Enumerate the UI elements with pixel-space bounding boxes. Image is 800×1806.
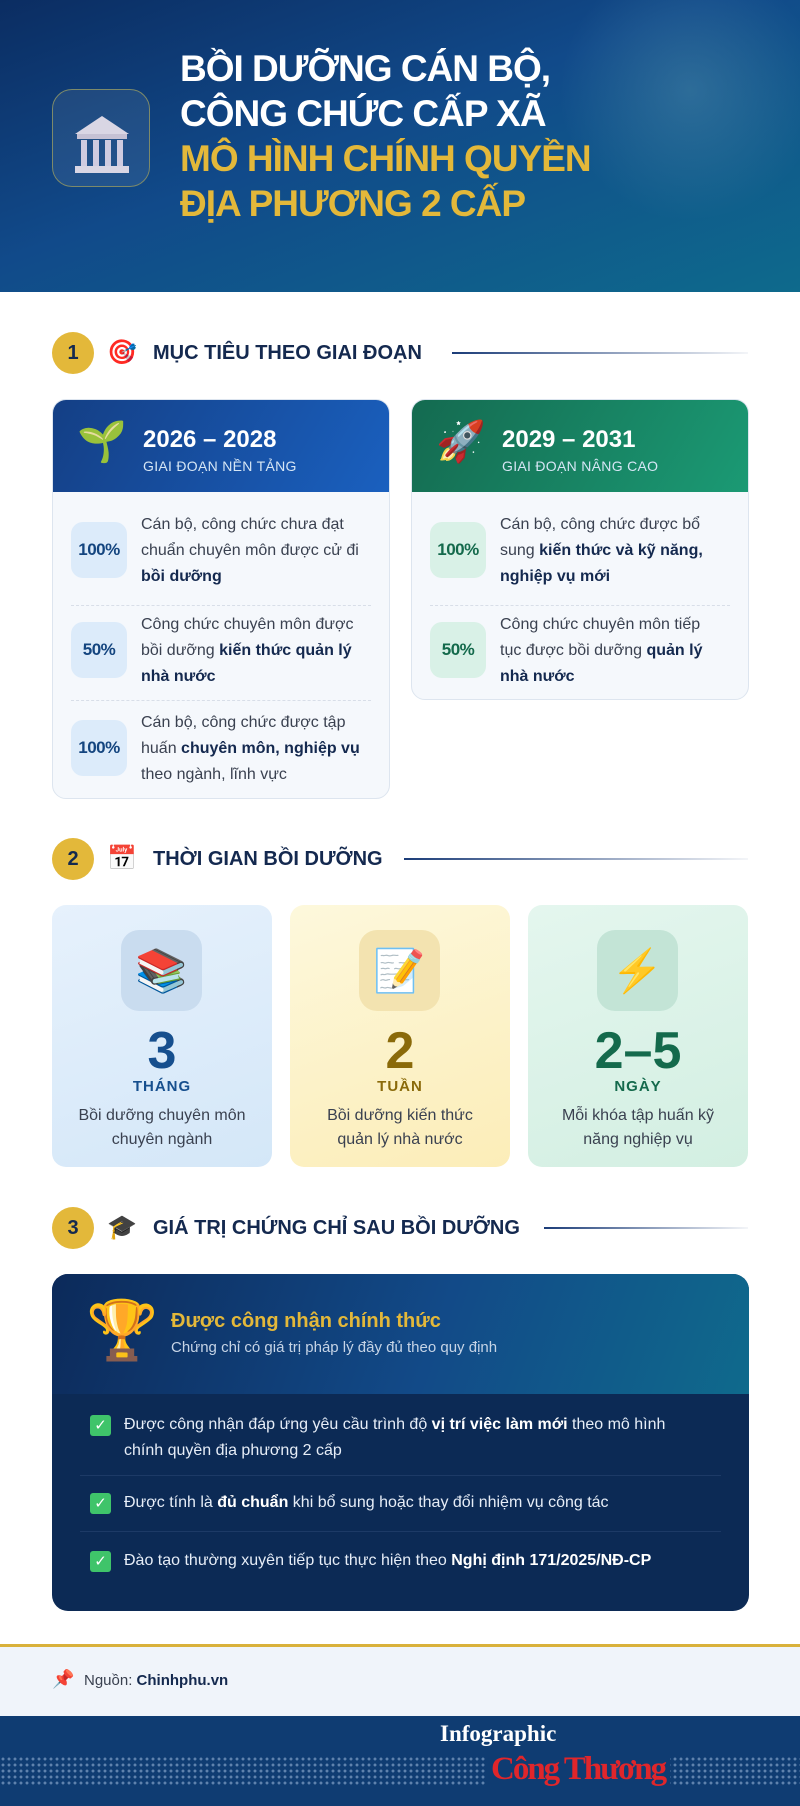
icon: pin: 📌 bbox=[52, 1669, 74, 1689]
row 1: Cán bộ, công chức chưa đạt chuẩn chuyên môn được cử đi bồi dưỡng bbox=[141, 516, 359, 585]
panel: 2-5 days bbox=[528, 905, 748, 1167]
row 1: 100% bbox=[78, 540, 120, 559]
panel: 2029-2031 bbox=[411, 399, 749, 700]
row 2 bbox=[430, 616, 702, 685]
footer source: Nguồn: Chinhphu.vn bbox=[84, 1672, 228, 1689]
icon: sprout: 🌱 bbox=[77, 420, 127, 464]
row 2: Công chức chuyên môn được bồi dưỡng kiến thức quản lý nhà nước bbox=[141, 616, 353, 685]
section 3 heading bbox=[52, 1207, 748, 1249]
title bbox=[180, 48, 550, 134]
panel: 2-5 days: 2–5 bbox=[595, 1022, 681, 1080]
logo bbox=[440, 1721, 670, 1787]
panel: certificate value: Chứng chỉ có giá trị pháp lý đầy đủ theo quy định bbox=[171, 1339, 497, 1356]
header banner bbox=[0, 0, 800, 292]
icon: document: 📝 bbox=[373, 947, 426, 994]
subtitle: MÔ HÌNH CHÍNH QUYỀN bbox=[180, 138, 591, 179]
panel: 3 months: Bồi dưỡng chuyên môn bbox=[78, 1107, 246, 1124]
item 1 bbox=[90, 1415, 665, 1459]
section 3 heading: 3 bbox=[67, 1217, 79, 1239]
section 1 heading: MỤC TIÊU THEO GIAI ĐOẠN bbox=[153, 342, 422, 364]
row 2: nhà nước bbox=[500, 668, 575, 685]
section 3 heading: GIÁ TRỊ CHỨNG CHỈ SAU BỒI DƯỠNG bbox=[153, 1217, 520, 1239]
title: BỒI DƯỠNG CÁN BỘ, bbox=[180, 48, 550, 89]
icon: lightning: ⚡ bbox=[611, 947, 664, 994]
panel: 2 weeks bbox=[290, 905, 510, 1167]
section 2 heading: THỜI GIAN BỒI DƯỠNG bbox=[153, 848, 383, 870]
icon: books bbox=[121, 930, 202, 1011]
panel: 2-5 days: NGÀY bbox=[614, 1078, 662, 1095]
icon: books: 📚 bbox=[135, 947, 188, 994]
row 2: 50% bbox=[442, 640, 474, 659]
icon: document bbox=[359, 930, 440, 1011]
callout title: Được công nhận chính thức bbox=[171, 1310, 441, 1332]
icon: calendar: 📅 bbox=[107, 845, 137, 872]
row 3: 100% bbox=[78, 738, 120, 757]
row 1: 100% bbox=[437, 540, 479, 559]
item 1: Được công nhận đáp ứng yêu cầu trình độ vị trí việc làm mới theo mô hình bbox=[124, 1416, 665, 1433]
panel: 3 months: THÁNG bbox=[133, 1078, 191, 1095]
icon: lightning bbox=[597, 930, 678, 1011]
panel: 2-5 days: năng nghiệp vụ bbox=[583, 1131, 693, 1148]
section 2 heading bbox=[52, 838, 748, 880]
item 2: ✓ bbox=[94, 1495, 107, 1512]
footer source bbox=[0, 1644, 800, 1716]
panel: 2029-2031: 2029 – 2031 bbox=[502, 426, 635, 453]
section 2 heading: 2 bbox=[67, 848, 79, 870]
row 1: Cán bộ, công chức được bổ sung kiến thức và kỹ năng, nghiệp vụ mới bbox=[500, 516, 703, 585]
panel: 2 weeks: TUẦN bbox=[377, 1078, 423, 1095]
section 1 heading: 1 bbox=[67, 342, 79, 364]
row 2: 50% bbox=[83, 640, 115, 659]
icon: graduation cap: 🎓 bbox=[107, 1214, 137, 1241]
item 1: chính quyền địa phương 2 cấp bbox=[124, 1442, 342, 1459]
icon: trophy: 🏆 bbox=[86, 1298, 158, 1363]
panel: 2 weeks: 2 bbox=[386, 1022, 414, 1080]
item 3: ✓ bbox=[94, 1553, 107, 1570]
subtitle: ĐỊA PHƯƠNG 2 CẤP bbox=[180, 183, 525, 224]
item 2: Được tính là đủ chuẩn khi bổ sung hoặc thay đổi nhiệm vụ công tác bbox=[124, 1494, 609, 1511]
row 3: Cán bộ, công chức được tập huấn chuyên môn, nghiệp vụ theo ngành, lĩnh vực bbox=[141, 714, 360, 783]
icon: rocket: 🚀 bbox=[436, 420, 486, 464]
title: CÔNG CHỨC CẤP XÃ bbox=[180, 93, 546, 134]
panel: 2026-2028: GIAI ĐOẠN NỀN TẢNG bbox=[143, 458, 297, 474]
panel: 2026-2028: 2026 – 2028 bbox=[143, 426, 276, 453]
icon: government building bbox=[52, 89, 150, 187]
item 1: ✓ bbox=[94, 1417, 107, 1434]
icon: target: 🎯 bbox=[107, 339, 137, 366]
panel: 3 months: chuyên ngành bbox=[112, 1131, 212, 1148]
panel: 3 months bbox=[52, 905, 272, 1167]
panel: 2026-2028 bbox=[52, 399, 390, 799]
panel: 2 weeks: Bồi dưỡng kiến thức bbox=[327, 1107, 473, 1124]
panel: 2 weeks: quản lý nhà nước bbox=[337, 1131, 463, 1148]
row 2: Công chức chuyên môn tiếp tục được bồi dưỡng quản lý bbox=[500, 616, 702, 659]
section 1 heading bbox=[52, 332, 748, 374]
panel: 2029-2031: GIAI ĐOẠN NÂNG CAO bbox=[502, 458, 658, 474]
panel: certificate value bbox=[52, 1274, 749, 1611]
footer brand band bbox=[0, 1716, 800, 1806]
subtitle bbox=[180, 138, 591, 224]
logo: Công Thương bbox=[491, 1751, 665, 1787]
logo: Infographic bbox=[440, 1721, 556, 1746]
panel: 2-5 days: Mỗi khóa tập huấn kỹ bbox=[562, 1107, 714, 1124]
item 3: Đào tạo thường xuyên tiếp tục thực hiện theo Nghị định 171/2025/NĐ-CP bbox=[124, 1552, 651, 1569]
panel: 3 months: 3 bbox=[148, 1022, 176, 1080]
